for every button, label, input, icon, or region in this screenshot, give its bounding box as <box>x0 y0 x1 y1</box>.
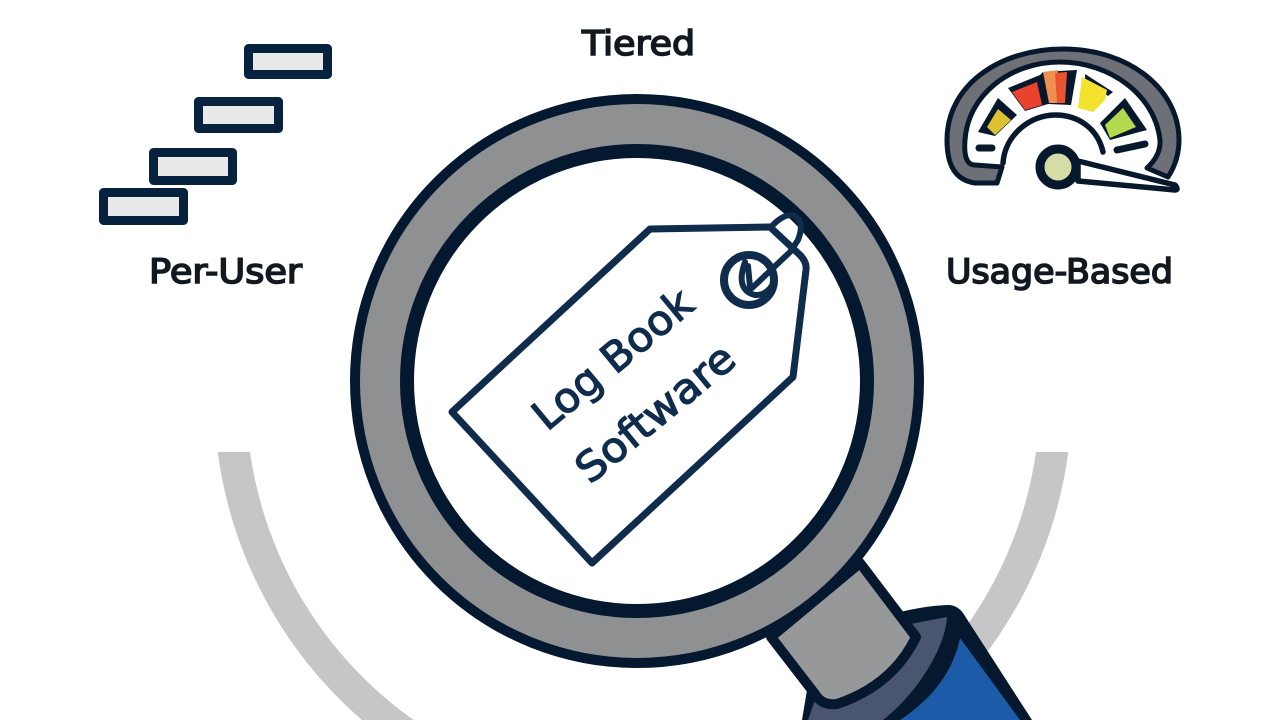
gauge hub <box>1040 149 1076 185</box>
gauge needle <box>1078 161 1177 190</box>
handle blue body <box>900 638 1020 720</box>
gauge segment: red and orange <box>1008 70 1077 111</box>
gauge band <box>947 49 1179 183</box>
handle neck <box>771 563 916 704</box>
price tag <box>452 215 806 563</box>
tag text: Log Book: Log Book <box>523 279 703 440</box>
handle collar <box>802 605 1032 720</box>
heading: Usage-Based: Usage-Based <box>946 252 1173 292</box>
tag text: Software: Software <box>566 334 745 493</box>
icon: usage gauge <box>947 49 1179 190</box>
gauge segment: green <box>1100 98 1147 140</box>
heading: Tiered: Tiered <box>581 24 695 64</box>
heading: Per-User: Per-User <box>149 252 302 292</box>
magnifier handle <box>771 563 1032 720</box>
magnifier ring <box>355 99 919 663</box>
gauge inner arc <box>1003 115 1103 163</box>
handle grip <box>808 617 947 720</box>
gauge ticks <box>979 144 1145 150</box>
gauge segment: yellow right <box>1078 74 1113 112</box>
magnifier lens <box>407 151 867 611</box>
background arc <box>218 452 1068 720</box>
tag outline <box>452 227 806 563</box>
tag hole <box>724 255 774 305</box>
gauge segment: yellow left <box>978 98 1017 136</box>
icon: stair steps <box>104 48 328 220</box>
tag string <box>742 215 801 295</box>
